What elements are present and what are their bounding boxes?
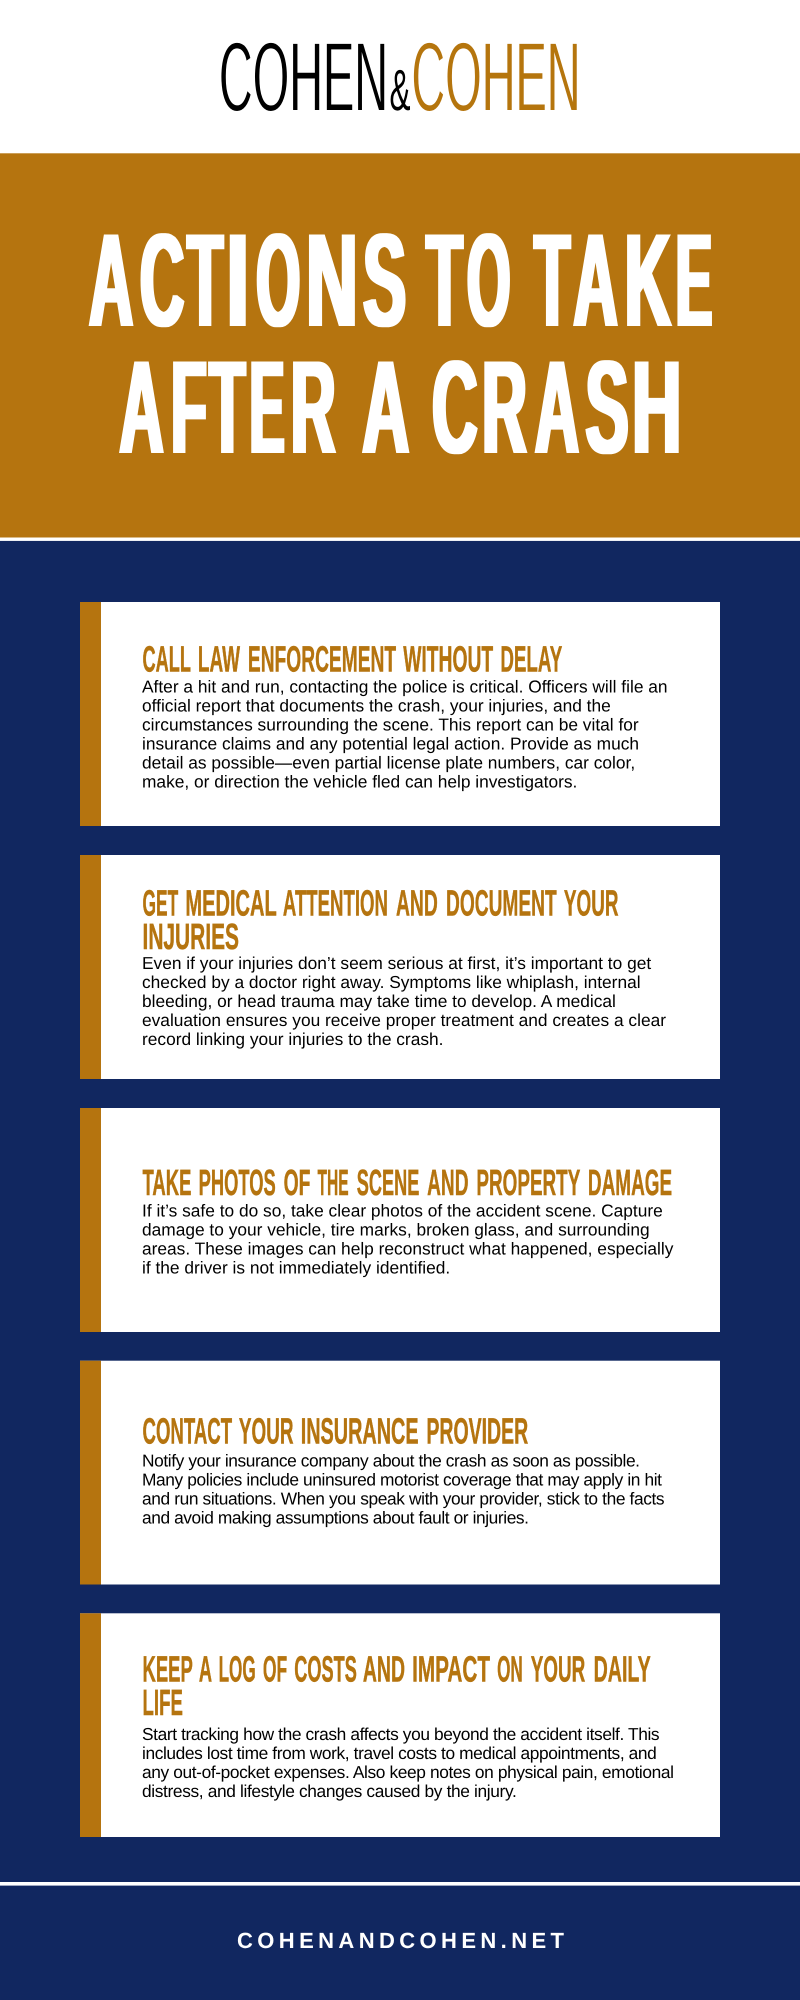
body text: take photos: if the driver is not immediately identified.: [142, 1258, 450, 1278]
body text: medical attention: checked by a doctor right away. Symptoms like whiplash, internal: [142, 972, 641, 992]
logo: Cohen & Cohen: COHEN: [219, 21, 388, 132]
heading: keep a log: COSTS: [294, 1649, 357, 1690]
footer website: COHENANDCOHEN.NET: [237, 1928, 565, 1953]
body text: insurance provider: Notify your insurance company about the crash as soon as possible.: [142, 1450, 640, 1470]
panel: take photos: [80, 1108, 720, 1332]
body text: keep a log: includes lost time from work, travel costs to medical appointments, and: [142, 1743, 657, 1763]
heading: call law enforcement: WITHOUT: [403, 638, 493, 680]
panel: medical attention: [80, 855, 720, 1079]
title text: R: [482, 334, 527, 482]
panel: keep a log: [80, 1613, 720, 1837]
body text: keep a log: any out-of-pocket expenses. Also keep notes on physical pain, emotional: [142, 1762, 674, 1782]
heading: keep a log: A: [199, 1649, 212, 1690]
title text: K: [625, 207, 671, 355]
heading: take photos: TAKE: [142, 1162, 191, 1203]
title text: T: [209, 334, 245, 482]
title text: S: [363, 207, 406, 355]
text: COHEN: [412, 21, 580, 132]
title text: R: [291, 334, 336, 482]
heading: medical attention: DOCUMENT: [446, 883, 557, 924]
body text: medical attention: Even if your injuries don’t seem serious at first, it’s important to get: [142, 953, 651, 973]
title text: [89, 207, 712, 482]
heading: medical attention: ATTENTION: [283, 883, 388, 924]
heading: insurance provider: YOUR: [239, 1411, 294, 1452]
heading: take photos: PHOTOS: [199, 1162, 276, 1203]
heading: call law enforcement: CALL: [142, 638, 191, 680]
body text: insurance provider: Many policies include uninsured motorist coverage that may apply in hit: [142, 1470, 662, 1490]
heading: medical attention: GET: [142, 883, 178, 924]
heading: call law enforcement: DELAY: [500, 638, 562, 680]
body text: keep a log: Start tracking how the crash affects you beyond the accident itself. This: [142, 1724, 660, 1744]
heading: medical attention: INJURIES: [142, 916, 239, 957]
heading: medical attention: AND: [396, 883, 438, 924]
body text: take photos: damage to your vehicle, tire marks, broken glass, and surrounding: [142, 1220, 650, 1240]
body text: call law enforcement: insurance claims and any potential legal action. Provide as much: [142, 733, 639, 753]
body text: take photos: areas. These images can help reconstruct what happened, especially: [142, 1238, 674, 1258]
heading: medical attention: YOUR: [564, 883, 618, 924]
heading: keep a log: LIFE: [142, 1682, 183, 1723]
title banner: [0, 153, 800, 538]
body text: insurance provider: and run situations. When you speak with your provider, stick to the facts: [142, 1488, 665, 1508]
navy content background: [0, 541, 800, 2000]
heading: call law enforcement: ENFORCEMENT: [248, 638, 396, 680]
title text: F: [171, 334, 207, 482]
title text: O: [256, 207, 300, 355]
heading: take photos: DAMAGE: [588, 1162, 672, 1203]
heading: keep a log: OF: [263, 1649, 287, 1690]
title text: O: [467, 207, 510, 355]
heading: take photos: PROPERTY: [476, 1162, 580, 1203]
title banner: E: [676, 207, 712, 355]
heading: take photos: AND: [427, 1162, 468, 1203]
heading: medical attention: [142, 883, 618, 957]
title text: A: [574, 207, 618, 355]
body text: keep a log: distress, and lifestyle changes caused by the injury.: [142, 1781, 517, 1801]
heading: keep a log: DAILY: [594, 1649, 651, 1690]
body text: call law enforcement: make, or direction the vehicle fled can help investigators.: [142, 771, 577, 791]
title text: C: [140, 207, 184, 355]
logo: Cohen & Cohen: &: [390, 58, 410, 123]
body text: call law enforcement: detail as possible—even partial license plate numbers, car color,: [142, 752, 635, 772]
heading: insurance provider: CONTACT: [142, 1411, 232, 1452]
body text: medical attention: record linking your injuries to the crash.: [142, 1029, 443, 1049]
panel: insurance provider: [80, 1361, 720, 1584]
title text: E: [250, 334, 284, 482]
body text: call law enforcement: official report that documents the crash, your injuries, and the: [142, 695, 611, 715]
title text: A: [535, 334, 579, 482]
heading: keep a log: YOUR: [531, 1649, 585, 1690]
heading: keep a log: [142, 1649, 651, 1723]
title text: N: [306, 207, 358, 355]
heading: insurance provider: PROVIDER: [426, 1411, 528, 1452]
heading: call law enforcement: LAW: [198, 638, 240, 680]
heading: keep a log: LOG: [219, 1649, 256, 1690]
title text: T: [426, 207, 463, 355]
body text: call law enforcement: circumstances surrounding the scene. This report can be vital for: [142, 714, 639, 734]
heading: take photos: OF: [284, 1162, 310, 1203]
title text: T: [187, 207, 223, 355]
title text: A: [362, 334, 408, 482]
heading: medical attention: MEDICAL: [185, 883, 277, 924]
title text: A: [120, 334, 164, 482]
heading: keep a log: ON: [497, 1649, 523, 1690]
title text: A: [89, 207, 133, 355]
title text: T: [534, 207, 570, 355]
title text: I: [226, 207, 249, 355]
heading: take photos: THE: [318, 1162, 349, 1203]
title text: C: [432, 334, 478, 482]
body text: medical attention: evaluation ensures you receive proper treatment and creates a clear: [142, 1010, 666, 1030]
heading: keep a log: AND: [363, 1649, 405, 1690]
body text: medical attention: bleeding, or head trauma may take time to develop. A medical: [142, 991, 616, 1011]
title text: S: [586, 334, 629, 482]
heading: take photos: SCENE: [357, 1162, 419, 1203]
body text: insurance provider: and avoid making assumptions about fault or injuries.: [142, 1508, 529, 1528]
panel: call law enforcement: [80, 602, 720, 826]
body text: call law enforcement: After a hit and run, contacting the police is critical. Officers will file an: [142, 676, 668, 696]
body text: take photos: If it’s safe to do so, take clear photos of the accident scene. Capture: [142, 1200, 663, 1220]
heading: keep a log: IMPACT: [412, 1649, 490, 1690]
title text: H: [632, 334, 681, 482]
heading: insurance provider: INSURANCE: [301, 1411, 419, 1452]
heading: keep a log: KEEP: [142, 1649, 193, 1690]
